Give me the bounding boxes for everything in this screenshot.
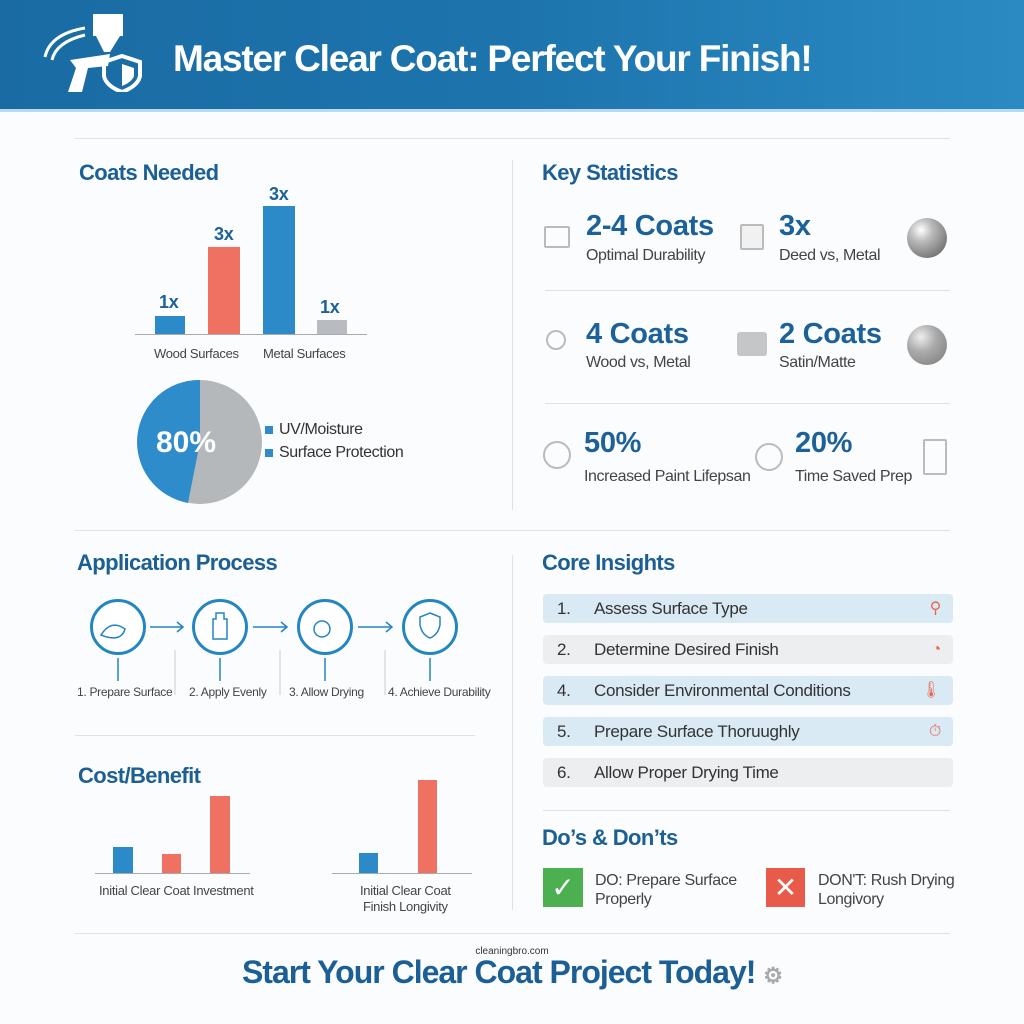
heading: key statistics: Key Statistics xyxy=(542,160,678,185)
text: 4. xyxy=(557,681,571,700)
text: 5. xyxy=(557,722,571,741)
stat: 2 coats xyxy=(737,318,947,371)
text: 6. xyxy=(557,763,571,782)
text: Consider Environmental Conditions xyxy=(594,681,851,700)
stat: 4 coats: 4 Coats xyxy=(586,318,689,350)
step 2 xyxy=(192,599,248,655)
stat: 4 coats xyxy=(546,318,690,371)
bar chart: coats: 1x xyxy=(159,292,178,312)
step 4 xyxy=(402,599,458,655)
bar chart: coats: Metal Surfaces xyxy=(263,346,346,361)
stat: 50% xyxy=(543,427,751,485)
stat: 2 coats: Satin/Matte xyxy=(779,354,856,371)
do item: ✓ xyxy=(551,872,575,903)
bar chart: coats xyxy=(135,184,367,361)
stat: 2-4 coats: Optimal Durability xyxy=(586,247,705,264)
pie legend: Surface Protection xyxy=(279,444,403,461)
stat: 3x: 3x xyxy=(779,210,811,242)
don't item: Longivory xyxy=(818,891,884,908)
do item: DO: Prepare Surface xyxy=(595,872,737,889)
chart: investment xyxy=(95,796,254,898)
heading: coats needed: Coats Needed xyxy=(79,160,219,185)
step 3 xyxy=(297,599,353,655)
panel: cost/benefit xyxy=(78,763,472,914)
stat: 2 coats: 2 Coats xyxy=(779,318,882,350)
stat: 4 coats: Wood vs, Metal xyxy=(586,354,690,371)
do item: Properly xyxy=(595,891,651,908)
footer call to action: Start Your Clear Coat Project Today! ⚙ xyxy=(242,954,782,990)
header banner xyxy=(0,0,1024,112)
title: Master Clear Coat: Perfect Your Finish! xyxy=(173,38,812,79)
don't item: ✕ xyxy=(774,872,797,903)
icon: spray gun with shield xyxy=(44,14,142,92)
heading: do's & don'ts: Do’s & Don’ts xyxy=(542,825,678,850)
insight rows xyxy=(543,594,953,623)
chart: longevity: Finish Longivity xyxy=(363,899,448,914)
text: ◔ xyxy=(932,641,941,658)
stat: 50%: Increased Paint Lifepsan xyxy=(584,468,751,485)
stat: 2-4 coats: 2-4 Coats xyxy=(586,210,714,242)
step 1 xyxy=(90,599,146,655)
text: Allow Proper Drying Time xyxy=(594,763,779,782)
stat: 3x xyxy=(740,210,947,264)
chart: longevity xyxy=(332,780,472,914)
panel: application process: 2. Apply Evenly xyxy=(189,685,267,699)
heading: cost/benefit: Cost/Benefit xyxy=(78,763,200,788)
stat: 50%: 50% xyxy=(584,427,641,459)
stat: 20% xyxy=(755,427,947,485)
chart: investment: Initial Clear Coat Investment xyxy=(99,883,254,898)
pie chart: 80% xyxy=(156,426,216,459)
panel: key statistics xyxy=(542,160,950,485)
stat: 2-4 coats xyxy=(544,210,714,264)
do item xyxy=(543,868,737,908)
panel: application process: 1. Prepare Surface xyxy=(77,685,172,699)
panel: coats needed xyxy=(79,160,403,504)
don't item xyxy=(766,868,954,908)
pie legend xyxy=(265,421,403,461)
stat: 3x: Deed vs, Metal xyxy=(779,247,880,264)
bar chart: coats: Wood Surfaces xyxy=(154,346,239,361)
insight rows: Assess Surface Type xyxy=(594,599,748,618)
text: 2. xyxy=(557,640,571,659)
text: Determine Desired Finish xyxy=(594,640,779,659)
pie chart xyxy=(137,380,262,504)
heading: application process: Application Process xyxy=(77,550,277,575)
panel: application process: 3. Allow Drying xyxy=(289,685,364,699)
footer url: cleaningbro.com xyxy=(475,946,549,957)
panel: application process xyxy=(77,550,491,699)
bar chart: coats: 1x xyxy=(320,297,339,317)
text: ⏱ xyxy=(929,723,941,740)
bar chart: coats: 3x xyxy=(214,224,233,244)
heading: core insights: Core Insights xyxy=(542,550,675,575)
pie legend: UV/Moisture xyxy=(279,421,363,438)
arrows and connectors xyxy=(100,612,441,695)
stat: 20%: 20% xyxy=(795,427,852,459)
panel: application process: 4. Achieve Durability xyxy=(388,685,490,699)
text: 🌡 xyxy=(921,682,941,699)
stat: 20%: Time Saved Prep xyxy=(795,468,912,485)
insight rows: 1. xyxy=(557,599,571,618)
chart: longevity: Initial Clear Coat xyxy=(360,883,451,898)
insight rows: ⚲ xyxy=(930,600,941,617)
panel: do's and don'ts xyxy=(542,825,954,908)
bar chart: coats: 3x xyxy=(269,184,288,204)
text: Prepare Surface Thoruughly xyxy=(594,722,799,741)
don't item: DON'T: Rush Drying xyxy=(818,872,954,889)
